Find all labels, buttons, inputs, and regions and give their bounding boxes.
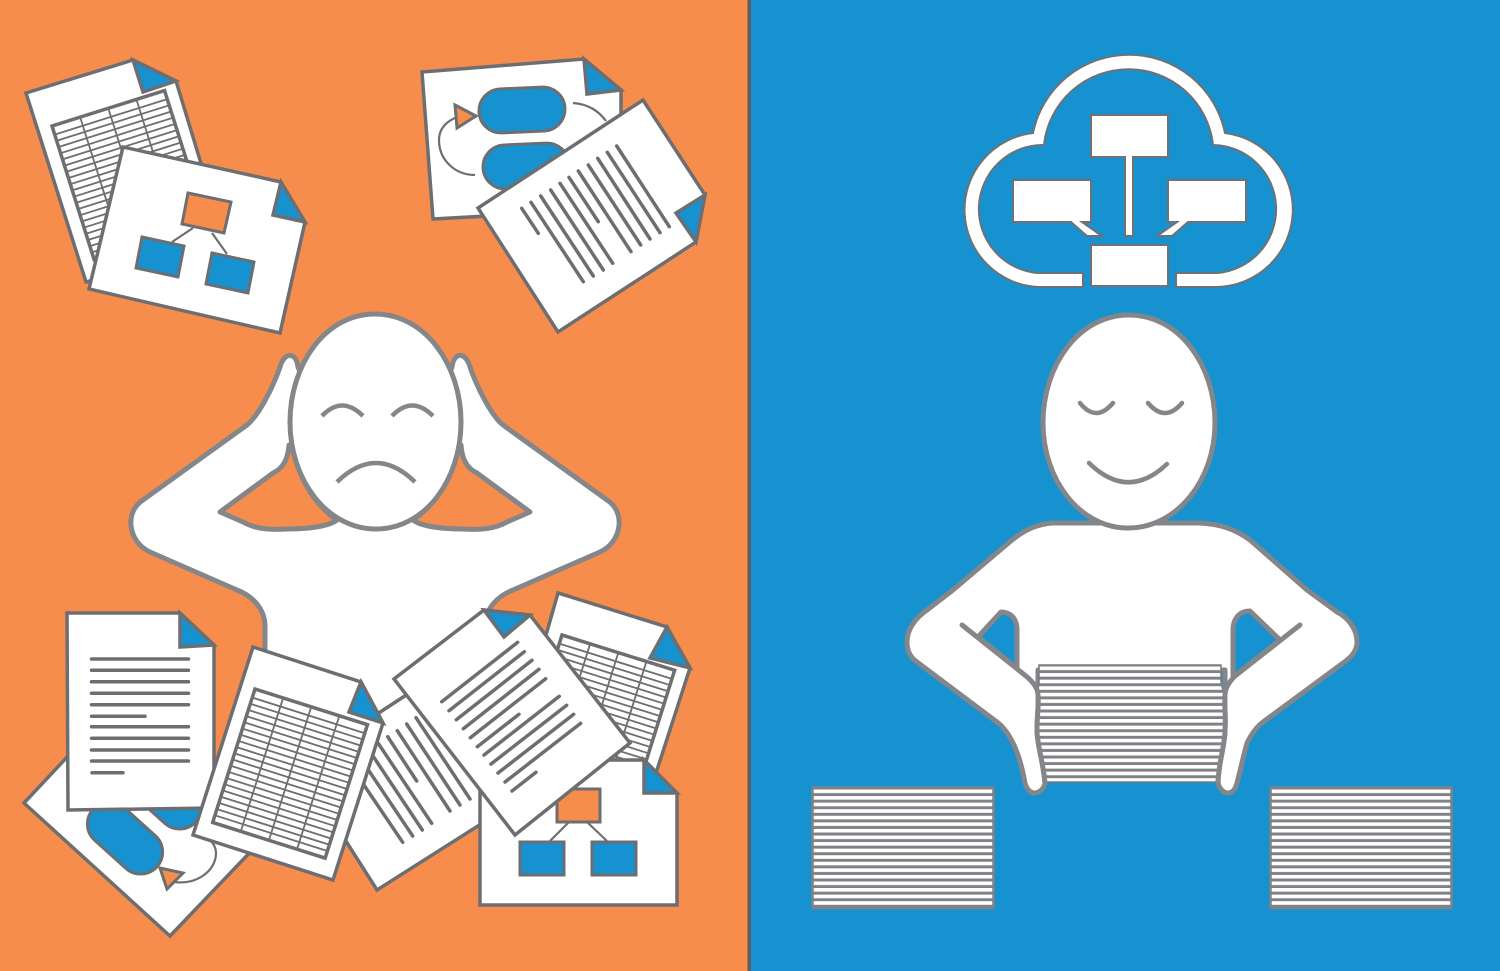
bottom-right document: spreadsheet [520, 593, 690, 804]
fold [484, 610, 530, 637]
flow arc [175, 840, 216, 882]
pill top [478, 86, 566, 134]
text lines [442, 642, 581, 791]
connectors [172, 228, 227, 254]
fold [273, 182, 305, 222]
left arm gap [978, 612, 1017, 668]
paper stack right [1270, 788, 1452, 908]
orange box [182, 193, 231, 233]
calm body with arms [907, 523, 1357, 793]
pill hidden [117, 748, 211, 838]
arrowhead [160, 868, 183, 889]
bottom box [1091, 245, 1168, 286]
right forearm line [1218, 625, 1300, 782]
flow arc left [439, 117, 475, 175]
top-right document: text [478, 100, 705, 332]
table [213, 689, 367, 858]
top box with stem [1091, 115, 1168, 236]
frown [337, 463, 415, 482]
page [480, 760, 677, 905]
page [67, 613, 214, 810]
top-left document: spreadsheet [26, 60, 207, 282]
panel: blue background [750, 0, 1500, 971]
bottom-left document: text [67, 613, 214, 810]
right arm gap [413, 445, 530, 529]
page [394, 610, 630, 835]
left box with pointer [1013, 180, 1102, 236]
bottom-centre document: text front [394, 610, 630, 835]
page [24, 722, 300, 936]
left arm gap [220, 445, 337, 529]
blue box right [206, 253, 254, 293]
bottom-centre document: spreadsheet [193, 647, 383, 880]
pill bottom [482, 142, 570, 190]
page [323, 673, 500, 890]
bottom-left document: flow chart [24, 722, 300, 936]
stressed person [131, 314, 619, 780]
orange box [557, 789, 600, 822]
right arm gap [1233, 611, 1280, 677]
page [193, 647, 383, 880]
flow arc right [573, 103, 606, 121]
page [26, 60, 203, 282]
bottom-right document: org chart [480, 760, 677, 905]
top-right document: flow chart [422, 59, 621, 219]
right closed eye [1148, 403, 1182, 413]
stressed body with raised arms [131, 355, 619, 780]
calm head [1043, 315, 1215, 528]
fold [650, 627, 690, 668]
left forearm line [962, 625, 1045, 783]
fold [676, 195, 705, 242]
panel: orange background [0, 0, 749, 971]
page [89, 147, 305, 333]
page [530, 593, 690, 790]
fold [584, 59, 621, 94]
fold [349, 682, 383, 723]
fold [133, 60, 176, 92]
stack of papers held [1037, 665, 1225, 782]
right eyebrow [392, 406, 433, 416]
smile [1089, 463, 1167, 482]
calm person [907, 315, 1357, 793]
blue box left [520, 842, 564, 875]
blue box right [592, 842, 636, 875]
right box with pointer [1157, 180, 1246, 236]
divider [748, 0, 751, 971]
text lines [92, 659, 188, 773]
bottom-centre document: text behind [323, 673, 500, 890]
text lines [522, 146, 669, 282]
paper stack left [812, 788, 994, 908]
stressed head [290, 314, 461, 529]
table [520, 635, 675, 804]
page [422, 59, 621, 219]
cloud outline [965, 55, 1293, 287]
table [52, 91, 207, 260]
fold [180, 613, 214, 647]
connectors [550, 822, 607, 841]
fold [644, 760, 677, 793]
text lines [349, 718, 470, 842]
left eyebrow [322, 406, 363, 416]
pill visible [78, 793, 172, 883]
page [478, 100, 705, 332]
left closed eye [1080, 403, 1113, 413]
arrowhead [455, 105, 476, 128]
top-left document: org chart [89, 147, 305, 333]
cloud with connected boxes [965, 55, 1293, 287]
blue box left [136, 237, 184, 277]
